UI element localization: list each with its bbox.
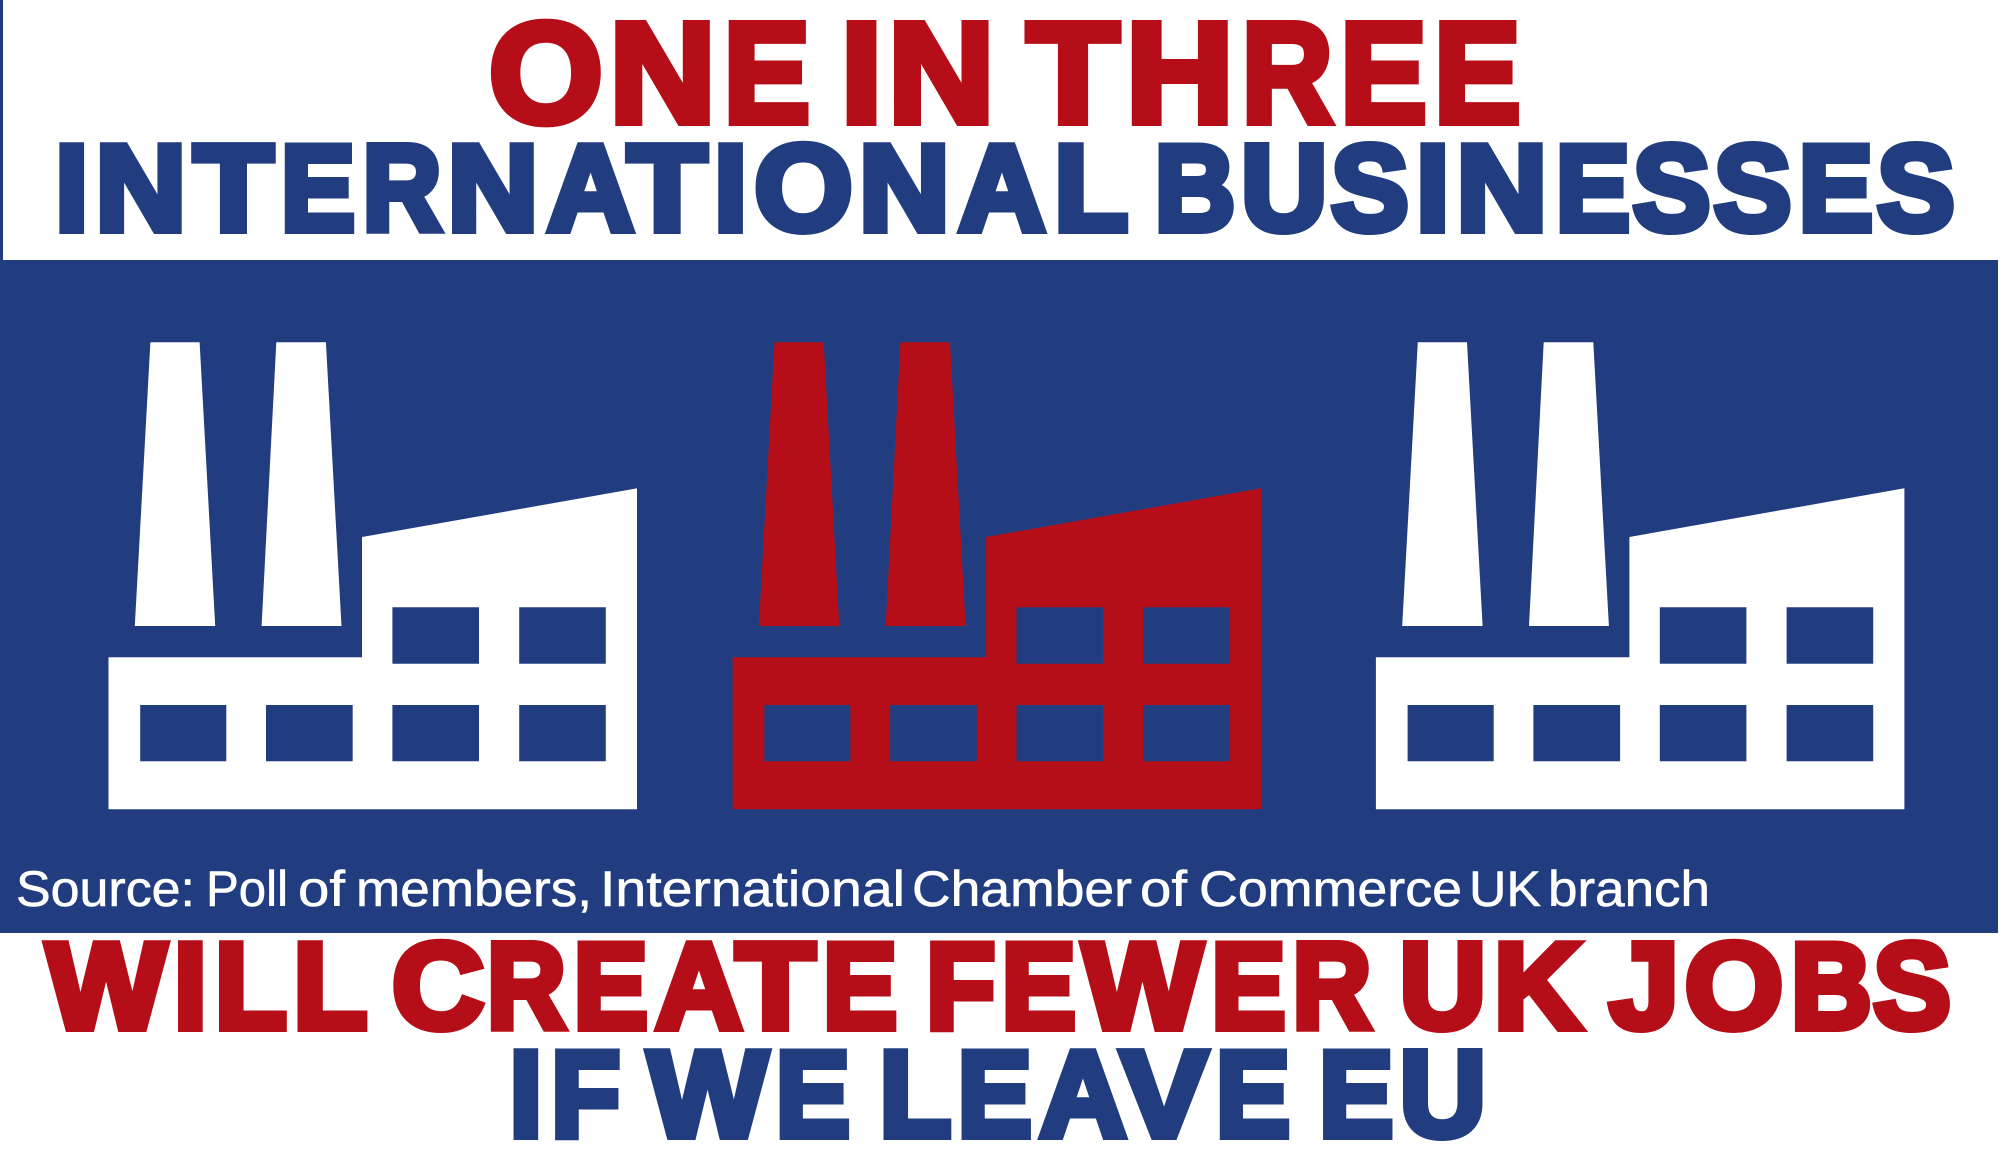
icon: white factory right <box>1376 342 1904 809</box>
heading: WILL CREATE FEWER UK JOBS: I <box>174 918 207 1054</box>
heading: WILL CREATE FEWER UK JOBS: L <box>215 918 287 1054</box>
heading: WILL CREATE FEWER UK JOBS: K <box>1494 918 1581 1054</box>
heading: WILL CREATE FEWER UK JOBS: E <box>1002 918 1076 1054</box>
heading: INTERNATIONAL BUSINESSES: O <box>754 120 852 256</box>
heading: IF WE LEAVE EU: I <box>510 1026 542 1162</box>
heading: WILL CREATE FEWER UK JOBS: L <box>293 918 365 1054</box>
source text: Source: <box>16 861 195 917</box>
source text: of <box>298 861 345 917</box>
source text: of <box>1140 861 1187 917</box>
source text: Commerce <box>1199 861 1462 917</box>
heading: WILL CREATE FEWER UK JOBS: S <box>1873 918 1951 1054</box>
source text: UK <box>1469 861 1541 917</box>
heading: INTERNATIONAL BUSINESSES: T <box>628 120 707 256</box>
heading: INTERNATIONAL BUSINESSES: A <box>547 120 634 256</box>
source text: members, <box>356 861 592 917</box>
heading: INTERNATIONAL BUSINESSES: E <box>1799 120 1873 256</box>
heading: INTERNATIONAL BUSINESSES: T <box>194 120 273 256</box>
heading: WILL CREATE FEWER UK JOBS: E <box>1212 918 1285 1054</box>
heading: IF WE LEAVE EU: E <box>1216 1026 1290 1162</box>
heading: WILL CREATE FEWER UK JOBS: U <box>1400 918 1486 1054</box>
heading: INTERNATIONAL BUSINESSES: N <box>1457 120 1547 256</box>
heading: INTERNATIONAL BUSINESSES: U <box>1241 120 1327 256</box>
heading: WILL CREATE FEWER UK JOBS: W <box>47 918 167 1054</box>
source text: Chamber <box>912 861 1132 917</box>
heading: WILL CREATE FEWER UK JOBS: W <box>1083 918 1203 1054</box>
heading: WILL CREATE FEWER UK JOBS: T <box>736 918 815 1054</box>
heading: IF WE LEAVE EU: E <box>958 1026 1032 1162</box>
heading: WILL CREATE FEWER UK JOBS: E <box>823 918 897 1054</box>
icon: red factory centre <box>733 342 1261 809</box>
heading: WILL CREATE FEWER UK JOBS: R <box>487 918 566 1054</box>
heading: WILL CREATE FEWER UK JOBS: F <box>926 918 995 1054</box>
heading: IF WE LEAVE EU: L <box>880 1026 951 1162</box>
heading: INTERNATIONAL BUSINESSES: I <box>1416 120 1449 256</box>
heading: INTERNATIONAL BUSINESSES: A <box>959 120 1045 256</box>
heading: INTERNATIONAL BUSINESSES: S <box>1331 120 1409 256</box>
heading: IF WE LEAVE EU: E <box>1319 1026 1393 1162</box>
heading: IF WE LEAVE EU: V <box>1121 1026 1207 1162</box>
heading: INTERNATIONAL BUSINESSES: S <box>1714 120 1791 256</box>
heading: WILL CREATE FEWER UK JOBS: A <box>656 918 742 1054</box>
icon: white factory left <box>108 342 637 809</box>
source text: branch <box>1548 861 1710 917</box>
source text: International <box>600 861 905 917</box>
heading: INTERNATIONAL BUSINESSES: N <box>96 120 186 256</box>
heading: WILL CREATE FEWER UK JOBS: C <box>392 918 484 1054</box>
heading: INTERNATIONAL BUSINESSES: S <box>1877 120 1955 256</box>
panel: factories background <box>0 260 1998 933</box>
heading: WILL CREATE FEWER UK JOBS: E <box>574 918 648 1054</box>
heading: INTERNATIONAL BUSINESSES: N <box>859 120 950 256</box>
heading: INTERNATIONAL BUSINESSES: S <box>1633 120 1710 256</box>
heading: IF WE LEAVE EU: U <box>1400 1026 1486 1162</box>
heading: INTERNATIONAL BUSINESSES: N <box>448 120 538 256</box>
heading: WILL CREATE FEWER UK JOBS: R <box>1293 918 1371 1054</box>
heading: INTERNATIONAL BUSINESSES: B <box>1155 120 1235 256</box>
heading: WILL CREATE FEWER UK JOBS: O <box>1685 918 1783 1054</box>
heading: INTERNATIONAL BUSINESSES: E <box>1556 120 1630 256</box>
heading: INTERNATIONAL BUSINESSES: E <box>281 120 355 256</box>
heading: IF WE LEAVE EU: F <box>551 1026 620 1162</box>
heading: INTERNATIONAL BUSINESSES: R <box>363 120 441 256</box>
heading: INTERNATIONAL BUSINESSES: I <box>55 120 88 256</box>
heading: INTERNATIONAL BUSINESSES: L <box>1054 120 1126 256</box>
heading: INTERNATIONAL BUSINESSES: I <box>714 120 747 256</box>
heading: WILL CREATE FEWER UK JOBS: J <box>1610 918 1679 1054</box>
source text: Poll <box>206 861 288 917</box>
heading: IF WE LEAVE EU: A <box>1040 1026 1126 1162</box>
heading: WILL CREATE FEWER UK JOBS: B <box>1791 918 1872 1054</box>
heading: IF WE LEAVE EU: E <box>776 1026 850 1162</box>
heading: IF WE LEAVE EU: W <box>648 1026 768 1162</box>
